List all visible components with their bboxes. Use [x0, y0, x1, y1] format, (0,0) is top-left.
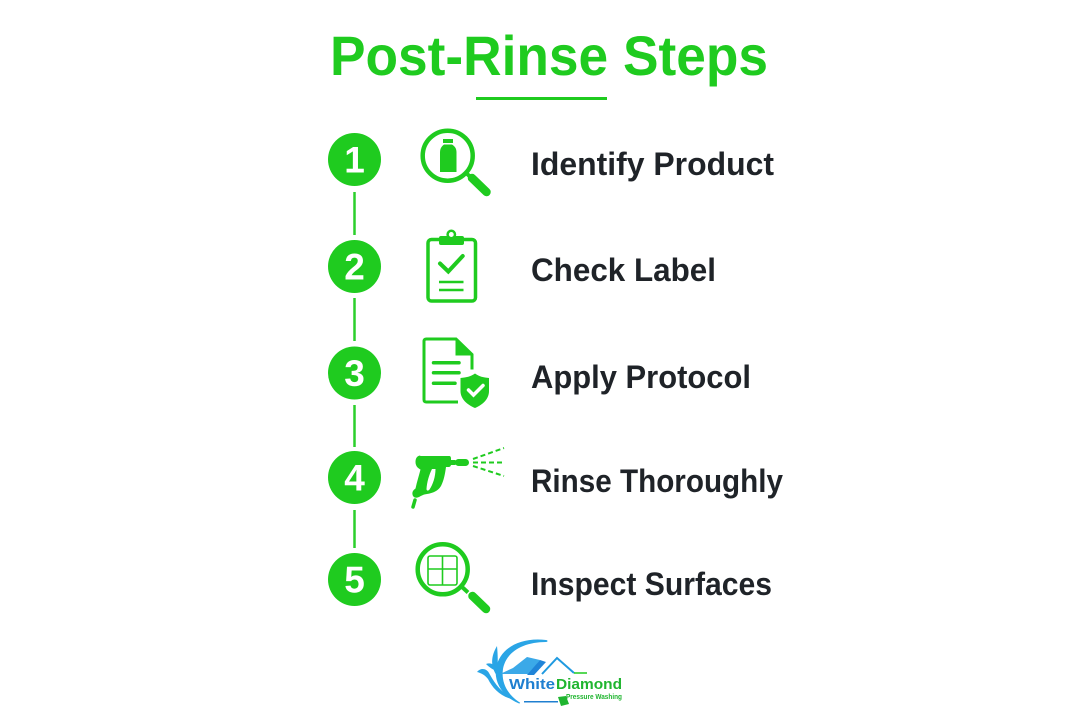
- step 5 number badge: [328, 553, 381, 606]
- step 3 number badge: 3: [344, 353, 365, 394]
- step 1: [328, 131, 774, 192]
- step 2: [328, 231, 716, 301]
- step 1 number badge: 1: [344, 140, 365, 180]
- icon: magnifier with bottle: [423, 131, 486, 192]
- step 4: [328, 448, 783, 507]
- icon: clipboard with check: [428, 231, 476, 301]
- icon: pressure washer gun: [412, 448, 505, 507]
- logo house roof: [500, 657, 587, 675]
- icon: document with shield: [424, 339, 489, 408]
- step timeline connectors: [353, 192, 356, 548]
- step 5 number badge: 5: [344, 560, 365, 600]
- step 3 label: Apply Protocol: [531, 359, 751, 395]
- step 3: [328, 339, 751, 408]
- step 2 label: Check Label: [531, 252, 716, 288]
- step 1 label: Identify Product: [531, 146, 774, 182]
- step 4 number badge: [328, 451, 381, 504]
- title: Post-Rinse Steps: [330, 24, 768, 87]
- step 4 label: Rinse Thoroughly: [531, 463, 783, 499]
- step 1 number badge: [328, 133, 381, 186]
- step 5 label: Inspect Surfaces: [531, 566, 772, 602]
- logo wordmark: White: [509, 676, 555, 693]
- logo: White Diamond Pressure Washing: [477, 640, 622, 706]
- step 5: [328, 544, 772, 609]
- step 3 number badge: [328, 346, 381, 400]
- step 2 number badge: [328, 240, 381, 293]
- logo water swoosh: [477, 640, 569, 706]
- logo: White Diamond Pressure Washing: Pressure Washing: [566, 692, 622, 701]
- logo: White Diamond Pressure Washing: Diamond: [556, 676, 622, 693]
- step 4 number badge: 4: [344, 458, 365, 498]
- step 2 number badge: 2: [344, 246, 365, 288]
- icon: magnifier with window: [418, 544, 486, 609]
